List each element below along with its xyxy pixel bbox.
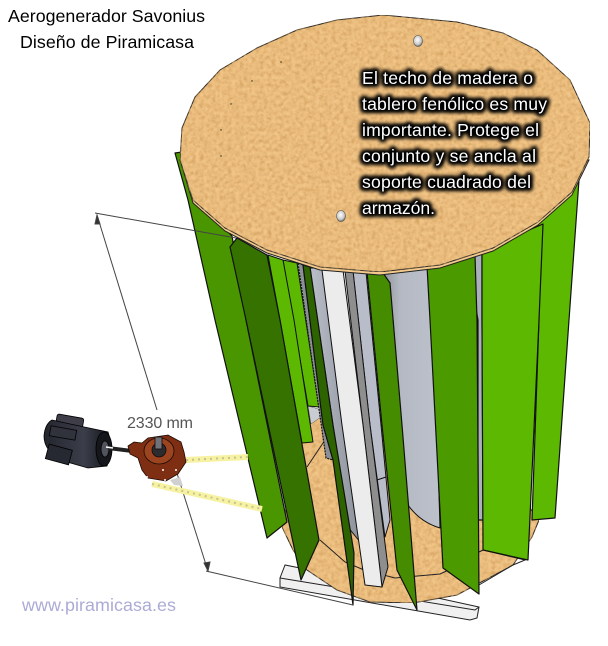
dimension lines xyxy=(95,213,353,605)
dimension label: 2330 mm xyxy=(127,415,193,432)
rear green vanes xyxy=(268,255,319,443)
roof bolts xyxy=(336,36,422,222)
drive chains xyxy=(152,457,262,509)
roof annotation: armazón. xyxy=(362,198,435,218)
roof annotation xyxy=(362,68,547,218)
roof annotation: El techo de madera o xyxy=(362,68,533,88)
central cylinder and shaft xyxy=(310,262,440,587)
gearbox xyxy=(128,435,186,486)
roof screw dots xyxy=(220,61,282,157)
left green vanes xyxy=(175,152,354,605)
right green vanes xyxy=(427,180,579,594)
title xyxy=(8,6,205,52)
roof annotation: soporte cuadrado del xyxy=(362,172,531,192)
wooden roof xyxy=(180,15,590,272)
roof edge xyxy=(180,160,589,275)
electric motor xyxy=(44,414,132,468)
title: Diseño de Piramicasa xyxy=(20,32,194,52)
roof annotation: conjunto y se ancla al xyxy=(362,146,536,166)
website: www.piramicasa.es xyxy=(21,595,176,615)
title: Aerogenerador Savonius xyxy=(8,6,205,26)
bottom wooden disc xyxy=(282,406,539,603)
roof annotation: tablero fenólico es muy xyxy=(362,94,547,114)
base beam xyxy=(280,565,479,620)
roof annotation: importante. Protege el xyxy=(362,120,539,140)
centre green vane xyxy=(367,272,417,610)
